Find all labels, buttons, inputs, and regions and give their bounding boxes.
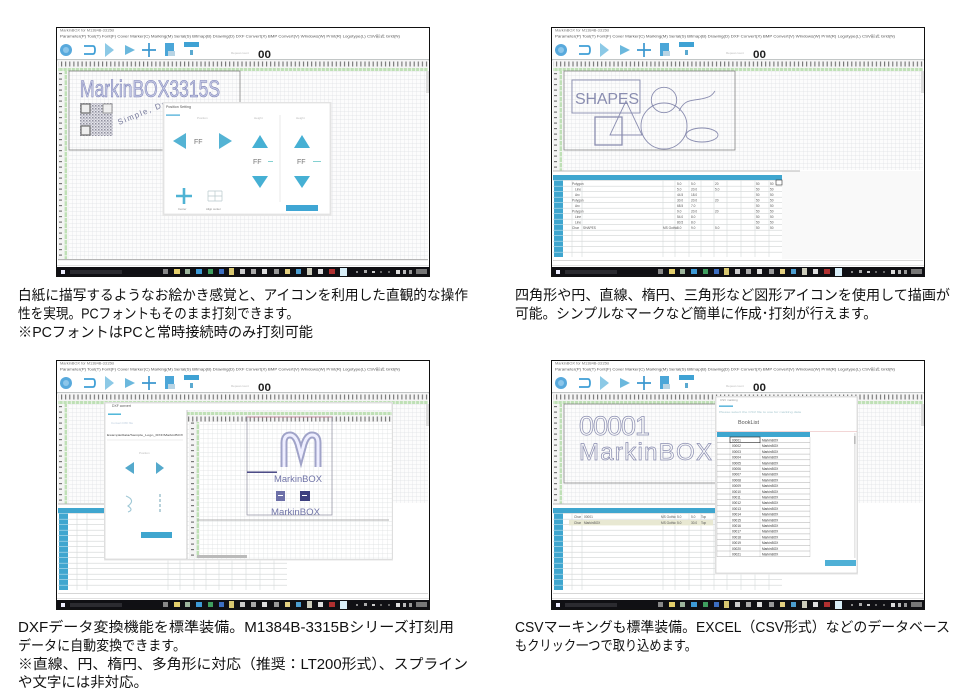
layout frame — [69, 71, 240, 150]
highlighted table rows: MS Gothic — [661, 515, 676, 519]
list rows: 00020 — [732, 547, 741, 551]
list rows: 00013 — [732, 507, 741, 511]
data table text: 5.0 — [715, 188, 720, 192]
list rows: 00015 — [732, 518, 741, 522]
data table text: 50 — [756, 188, 760, 192]
list rows: 00009 — [732, 484, 741, 488]
MarkinBOX text: MarkinBOX — [579, 439, 712, 466]
dialog: CSV list: Please select the CSV file to use for marking data — [719, 410, 802, 414]
list rows: 00003 — [732, 450, 741, 454]
data table text: 5.0 — [691, 182, 696, 186]
list rows: MarkinBOX — [762, 501, 779, 505]
DXF preview — [187, 410, 392, 559]
caption: text editing — [18, 287, 468, 341]
data table text: 20 — [715, 198, 719, 202]
caption: DXF conversion: ※直線、円、楕円、多角形に対応（推奨：LT200形式）、スプライン — [18, 655, 468, 673]
data table text: 50 — [756, 193, 760, 197]
caption: DXF conversion: データに自動変換できます。 — [18, 636, 186, 654]
caption: DXF conversion: や文字には非対応。 — [18, 674, 148, 691]
QR code — [80, 103, 113, 136]
list rows: MarkinBOX — [762, 461, 779, 465]
dialog: DXF convert: Convert DXF file — [111, 421, 133, 425]
data table text: 50 — [770, 204, 774, 208]
data table text: 20 — [715, 182, 719, 186]
data table text: 30.0 — [677, 198, 683, 202]
highlighted table rows: MarkinBOX — [584, 521, 601, 525]
dialog: CSV list — [715, 396, 858, 574]
frame border — [56, 28, 430, 276]
highlighted table rows: 00001 — [584, 515, 593, 519]
data table text: 5.0 — [715, 226, 720, 230]
DXF preview: MarkinBOX — [271, 507, 320, 517]
data table text — [572, 182, 774, 230]
data table text: 68.5 — [677, 204, 683, 208]
caption: shapes: 可能。シンプルなマークなど簡単に作成･打刻が行えます。 — [515, 306, 877, 322]
logo M — [284, 435, 318, 467]
list rows: MarkinBOX — [762, 490, 779, 494]
dialog: DXF convert: DXF convert — [112, 404, 131, 408]
data table text: 20.0 — [691, 188, 697, 192]
dialog: position setting — [162, 102, 332, 216]
list rows: 00011 — [732, 496, 741, 500]
data table text: 80.5 — [677, 220, 683, 224]
list rows: 00021 — [732, 552, 741, 556]
list rows: 00005 — [732, 461, 741, 465]
list rows: MarkinBOX — [762, 530, 779, 534]
list rows — [717, 437, 810, 557]
data table text: 50 — [756, 204, 760, 208]
list rows: MarkinBOX — [762, 467, 779, 471]
list rows: MarkinBOX — [762, 444, 779, 448]
caption: text editing: ※PCフォントはPCと常時接続時のみ打刻可能 — [18, 324, 313, 341]
DXF preview: MarkinBOX — [274, 474, 322, 484]
list rows: MarkinBOX — [762, 535, 779, 539]
data table text: 5.0 — [677, 226, 682, 230]
data table text: Polygon — [572, 198, 584, 202]
dialog: position setting: Height — [296, 116, 305, 120]
dialog: position setting: FF — [194, 139, 203, 146]
caption: shapes: 四角形や円、直線、楕円、三角形など図形アイコンを使用して描画が — [515, 286, 950, 304]
highlighted table rows: 5.0 — [677, 521, 682, 525]
highlighted table rows: 30.0 — [691, 521, 697, 525]
data table text: Char — [572, 226, 580, 230]
dialog: position setting: Center — [178, 207, 186, 211]
data table text: Polygon — [572, 210, 584, 214]
list rows: 00017 — [732, 530, 741, 534]
dialog: DXF convert — [104, 402, 393, 560]
layout frame — [564, 71, 735, 150]
data table text: Line — [575, 215, 581, 219]
data table text: 50 — [756, 210, 760, 214]
data table text: 50 — [770, 210, 774, 214]
list rows: 00007 — [732, 473, 741, 477]
list rows: MarkinBOX — [762, 552, 779, 556]
serial number text: 00001 — [579, 411, 650, 441]
caption: text editing: 性を実現。PCフォントもそのまま打刻できます。 — [18, 306, 299, 322]
caption: text editing: 白紙に描写するようなお絵かき感覚と、アイコンを利用した直観的な操作 — [18, 287, 468, 304]
caption: CSV marking: もクリック一つで取り込めます。 — [515, 638, 697, 654]
data table text: 8.0 — [691, 215, 696, 219]
highlighted table rows: Top — [701, 515, 706, 519]
panel: shapes screenshot — [551, 27, 925, 277]
panel: text editing screenshot — [56, 27, 430, 277]
data table text: 50 — [756, 220, 760, 224]
data table text: 50 — [770, 226, 774, 230]
list rows: 00002 — [732, 444, 741, 448]
list rows: 00006 — [732, 467, 741, 471]
dialog: position setting: Height — [254, 116, 263, 120]
data table text: 20.0 — [691, 198, 697, 202]
data table text: Polygon — [572, 182, 584, 186]
dialog: CSV list: CSV marking — [720, 398, 738, 402]
marking text: MarkinBOX3315S — [80, 76, 220, 103]
list rows: 00016 — [732, 524, 741, 528]
caption: CSV marking: CSVマーキングも標準装備。EXCEL（CSV形式）などのデータベース — [515, 618, 950, 636]
panel: CSV marking screenshot — [551, 360, 925, 610]
list rows: MarkinBOX — [762, 478, 779, 482]
list rows: 00019 — [732, 541, 741, 545]
data table text: 8.0 — [691, 220, 696, 224]
data table text: 50 — [756, 215, 760, 219]
list rows: MarkinBOX — [762, 450, 779, 454]
data table text: 50 — [770, 215, 774, 219]
list rows: 00012 — [732, 501, 741, 505]
list rows: 00001 — [732, 438, 741, 442]
data table text: SHAPES — [583, 226, 596, 230]
data table text: 9.0 — [677, 210, 682, 214]
list rows: MarkinBOX — [762, 518, 779, 522]
data table text: Line — [575, 188, 581, 192]
panel: DXF conversion screenshot — [56, 360, 430, 610]
dialog: DXF convert: ExampleData/Sample_Logo_DXF/MarkinBOX — [107, 433, 183, 437]
layout frame — [564, 404, 735, 483]
list rows: 00008 — [732, 478, 741, 482]
list rows: MarkinBOX — [762, 438, 779, 442]
dialog: position setting: FF — [253, 159, 262, 166]
list rows: 00004 — [732, 456, 741, 460]
slanted text: Simple, Dr — [116, 100, 166, 127]
data table text: 5.0 — [677, 188, 682, 192]
dialog: position setting: Position Setting — [166, 105, 191, 109]
caption: DXF conversion: DXFデータ変換機能を標準装備。M1384B-3315Bシリーズ打刻用 — [18, 618, 454, 636]
data table text: 50 — [770, 188, 774, 192]
highlighted table rows: Top — [701, 521, 706, 525]
list rows: MarkinBOX — [762, 473, 779, 477]
highlighted table rows: 5.0 — [677, 515, 682, 519]
highlighted table rows: Char — [574, 515, 582, 519]
data table text: 50 — [770, 193, 774, 197]
dialog: position setting: Position — [197, 116, 208, 120]
list rows: MarkinBOX — [762, 524, 779, 528]
list rows: MarkinBOX — [762, 547, 779, 551]
list rows: 00018 — [732, 535, 741, 539]
data table text: 54.0 — [677, 215, 683, 219]
list rows: MarkinBOX — [762, 507, 779, 511]
caption: DXF conversion — [18, 618, 468, 691]
data table text: 50 — [756, 226, 760, 230]
list rows: MarkinBOX — [762, 513, 779, 517]
caption: shapes — [515, 286, 950, 322]
dialog: CSV list: BookList — [738, 420, 760, 426]
data table text: 50 — [756, 182, 760, 186]
list rows: MarkinBOX — [762, 541, 779, 545]
highlighted table rows: MS Gothic — [661, 521, 676, 525]
data table text: 18.0 — [691, 193, 697, 197]
data table text: 50 — [770, 182, 774, 186]
data table text: Line — [575, 220, 581, 224]
data table text: 20 — [715, 210, 719, 214]
highlighted table rows — [569, 515, 713, 525]
data table text: 44.5 — [677, 193, 683, 197]
data table text: Arc — [575, 193, 580, 197]
data table text: 7.0 — [691, 204, 696, 208]
list rows: MarkinBOX — [762, 496, 779, 500]
data table text: MS Gothic — [663, 226, 678, 230]
data table text: 20.0 — [691, 210, 697, 214]
list rows: 00014 — [732, 513, 741, 517]
highlighted table rows: Char — [574, 521, 582, 525]
dialog: DXF convert: Position — [139, 451, 150, 455]
dialog: position setting: FF — [297, 159, 306, 166]
SHAPES text: SHAPES — [575, 91, 639, 108]
data table text: 5.0 — [677, 182, 682, 186]
data table text: 50 — [756, 198, 760, 202]
dialog: position setting: Align center — [206, 207, 221, 211]
caption: CSV marking — [515, 618, 950, 654]
data table text: Arc — [575, 204, 580, 208]
data table text: 50 — [770, 198, 774, 202]
list rows: MarkinBOX — [762, 484, 779, 488]
data table text: 9.0 — [691, 226, 696, 230]
list rows: MarkinBOX — [762, 456, 779, 460]
shapes drawing — [572, 80, 718, 149]
highlighted table rows: 5.0 — [691, 515, 696, 519]
data table text: 50 — [770, 220, 774, 224]
list rows: 00010 — [732, 490, 741, 494]
